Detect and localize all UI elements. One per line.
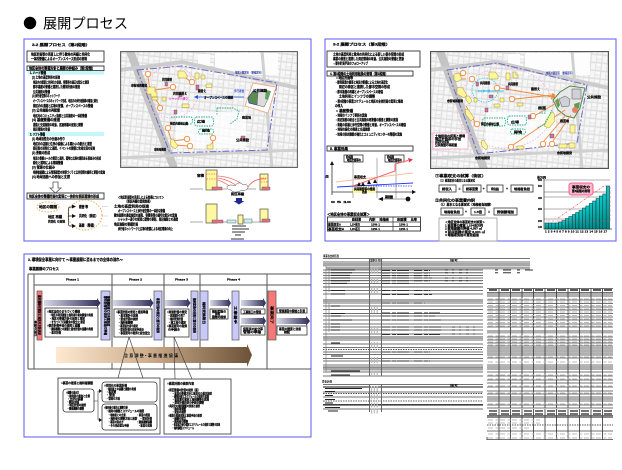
stage 3 text list: ○ 基盤整備 — [336, 108, 353, 113]
formula block: 1 事業費の積算 1,234百万円 — [445, 222, 483, 227]
callout: phase 3 details: ・都市計画決定の手続き調整 — [172, 400, 204, 404]
line chart — [325, 154, 416, 204]
formula block: 4 地権者負担の算定結果 — [445, 232, 479, 237]
bar chart: 400 — [538, 196, 542, 200]
phase text boxes: 事業の精算と効果 — [279, 326, 301, 331]
formula block: ①事業収支の試算（街区） — [435, 173, 486, 178]
phase text boxes: ・関係機関との調整と都市計画の協議の実施 — [49, 326, 93, 331]
stage 2 text list: (3) 管理の仕組み — [32, 164, 55, 170]
line chart: 効果 — [362, 189, 367, 194]
phase text boxes: 工事施工の管理 — [243, 309, 261, 314]
formula block: + — [483, 187, 485, 191]
phase frame: Phase 2 — [129, 278, 142, 282]
arrow: consultation band: 合 意 調 整・事 業 推 進 協 議 — [124, 352, 178, 358]
explanatory notes: シャッター通りの解消と建物の更新、周辺施設との連携 — [118, 216, 178, 222]
map legend — [433, 133, 468, 149]
explanatory notes: 歩行者ネットワークと広場の配置による地区環境の向上 — [118, 226, 173, 231]
line chart: 第3段階 — [387, 154, 394, 159]
line chart: 期間 — [385, 194, 393, 199]
sub box: coordination — [102, 404, 157, 430]
map: stage 2 — [120, 51, 298, 168]
callout: phase 3 details: ・組織の設立 — [172, 416, 186, 420]
panel: stage 2 process — [24, 39, 311, 241]
map: stage 3: 街区内緑地公園 — [481, 121, 499, 126]
phase bars: 事業完了 — [270, 306, 275, 324]
stage 2 text list: 道路と交通施設の改善、区画再編の促進と調整 — [33, 122, 83, 127]
explanatory notes: 土地の高度利用の促進 — [114, 204, 149, 208]
table: annual summary — [487, 409, 613, 440]
bar chart: 1 2 3 4 5 6 7 8 9 10 11 12 13 14 15 16 17 — [545, 230, 607, 234]
formula block: + — [506, 187, 508, 191]
sub box: overview — [63, 389, 94, 412]
stage 3 text list: の導入 — [335, 103, 343, 108]
bar chart: 第3段階の実現 — [572, 188, 590, 193]
map: stage 2: 共同建替 — [162, 76, 172, 82]
callout: phase 3 details: ○事業計画の検討内容 — [167, 380, 194, 386]
stage 2 result box — [27, 193, 104, 199]
stage 3 text list: 土地利用とインフラの調整 — [335, 94, 375, 99]
sub box: coordination: ○権利者の意向と調整方針 — [104, 404, 128, 410]
formula block: 利益 — [491, 186, 499, 191]
map legend: 共同化の促進 — [435, 139, 449, 144]
phase frame: 事業の流れ — [34, 320, 39, 336]
callout: phase 3 details: ・権利者調整 — [172, 406, 186, 411]
stage 2 text list: 都市基盤の整備と連携した開発計画の推進 — [33, 84, 80, 89]
table: cost detail — [323, 254, 535, 376]
phase frame: Phase 4 — [227, 278, 240, 282]
stage 3 text list: ○ 地区計画等 — [336, 75, 353, 80]
map: stage 2: 広場 — [197, 118, 205, 124]
title: 展開プロセス — [43, 16, 128, 32]
phase bars: 基本構想の策定と地区の方針決定 — [37, 295, 42, 335]
sub box: coordination: ・地権者との合意 ・事業の推進 — [108, 412, 150, 417]
callout: phase 2 details: ○事業の推進と権利者調整 — [61, 380, 93, 385]
phase text boxes: の手続き — [168, 326, 180, 332]
process diagram — [37, 200, 108, 230]
table: funding detail: 備考 — [450, 383, 459, 387]
phase frame — [28, 274, 311, 369]
stage 3 text list: 周辺の街区と連携した都市空間の形成 — [335, 84, 390, 89]
table: business comparison: ＜地区全体の事業収支試算＞ — [327, 212, 370, 216]
bar chart: 600 — [538, 178, 542, 182]
table: business comparison: 12% 1 — [371, 227, 380, 231]
table: cost detail: 金額(千円) — [370, 258, 381, 262]
map: stage 3: 広場 — [511, 119, 519, 124]
stage 2 summary box — [27, 51, 104, 62]
phase bars: 工事着手 — [234, 306, 238, 324]
map: stage 2: オープンスペースの連続 — [204, 94, 233, 100]
stage 2 text list: 緑化と照明による環境整備 — [33, 160, 63, 165]
map: stage 2: シャッター通り — [169, 96, 188, 100]
stage 2 text list: 地区内の建替と共同化の促進、容積率の適正な配分と誘導 — [33, 80, 89, 84]
formula block: 1.5倍 — [474, 209, 482, 214]
process diagram: 共同化（街区） — [79, 213, 98, 218]
sub box: overview: ・方針の協議 — [67, 396, 83, 401]
table: cost detail: 備考 — [450, 258, 459, 262]
phase text boxes: ○都市計画手法の検討と協議 — [47, 322, 80, 328]
map: stage 2: 建替え — [198, 88, 206, 93]
stage 2 text list: 2. ソフト整備 — [30, 131, 45, 136]
map legend: 土地利用の促進と環境 — [435, 133, 465, 138]
map: stage 2: 地区計画区域 （整備区域） — [235, 70, 263, 74]
stage 3 summary box — [327, 51, 420, 67]
line chart: 地区計画等の — [388, 157, 402, 162]
phase text boxes: 権利変換の — [212, 308, 226, 314]
stage 2 text list: 周辺環境の改善 — [33, 126, 50, 132]
bar chart — [537, 174, 612, 234]
formula block: （1）事業収支の基本となる算定式 — [439, 178, 475, 182]
formula block: + — [465, 210, 467, 214]
phase text boxes: ・権利者調整 — [118, 320, 133, 324]
formula block: 総事業費 — [466, 186, 478, 191]
explanatory notes: ＜地区計画等の見直しによる効果について＞ — [118, 194, 164, 200]
table: business comparison: 事業収支B — [328, 226, 345, 231]
map: stage 2: 共同建替え — [173, 90, 187, 96]
formula block: （1）基本となる算定式（地権者負担額） — [439, 202, 493, 206]
sub box: planning: ・権利者との協議と調整の実施 — [106, 386, 136, 391]
callout: phase 3 details: ・権利調整スケジュール — [172, 425, 194, 430]
sub box: coordination: ・権利の調整とスケジュールの確認 — [106, 408, 144, 413]
formula block: ＜地区全体の事業収支の試算＞ — [445, 219, 485, 224]
map: stage 3: 建替え — [531, 86, 540, 91]
sub box: overview: ・調査の実施 — [67, 399, 79, 404]
line chart: 第2段階 — [346, 154, 353, 159]
formula block: ②共同化の事業費内訳 — [435, 198, 476, 202]
phase text boxes: ・まちづくり協議会の設立と運営 — [49, 319, 85, 324]
stage 2 text list: 街区内の通路と広場の配置、オープンスペースの整備 — [33, 103, 93, 108]
phase text boxes — [45, 308, 307, 337]
stage 2 text list: 公共施設の整備 — [33, 89, 50, 94]
sub box: overview: ・権利者の意向と合意 — [67, 393, 90, 398]
stage 2 text list: 地権者組織による管理運営の体制づくりと公共空間の維持と更新の実施 — [33, 169, 105, 174]
phase frame: Phase 1 — [66, 278, 79, 282]
map: stage 2: 市街地再開発 — [131, 82, 147, 88]
stage 3 text list: ・地域の防災機能の強化とコミュニティセンターの整備の実施 — [335, 132, 402, 136]
map: stage 3: 共同建替 — [480, 80, 490, 85]
phase text boxes: ・資金計画の検討 — [118, 316, 138, 321]
sub box: coordination: ・事業の進め方 ・関係機関協議 — [108, 419, 152, 424]
map: stage 2: 商業地 — [242, 114, 251, 120]
formula block: = — [488, 210, 490, 214]
map: stage 3: 商業地 — [560, 118, 569, 123]
table: business comparison: 床面積 比率 — [397, 216, 417, 222]
process diagram: 地区の課題 — [39, 204, 58, 209]
explanatory notes — [114, 194, 178, 231]
section diagram: after — [190, 204, 270, 239]
arrow: blue down — [234, 198, 244, 204]
map: stage 3 — [430, 51, 609, 169]
table: business comparison: 12% 1 — [399, 222, 408, 226]
map: stage 3: 地区計画区域 （整備区域） — [546, 70, 574, 75]
sub box: planning: ・資金 — [106, 392, 115, 397]
explanatory notes: 敷地面積の最低限度の緩和、容積率等の適切な配分の実施 — [114, 212, 177, 217]
table: business comparison: 1,234百万 — [350, 226, 360, 231]
phase text boxes: 検証 — [284, 329, 290, 334]
stage 2 heading: 3-2 展開プロセス（第2段階） — [32, 42, 90, 47]
sub box: overview: ○協議の進め方 — [66, 390, 79, 394]
phase text boxes: ・地区の整備方針の検討と策定 — [49, 316, 85, 320]
formula block: 総収入 — [442, 186, 452, 191]
phase text boxes: 保留床の処分等 — [243, 326, 263, 331]
explanatory notes: （街区再編の実現効果） — [125, 198, 152, 204]
stage 3 text list: ・地域のインフラ更新の実施 — [335, 112, 367, 118]
stage 3 text list: 4. 第3段階の土地利用転換の実現（第3段階） — [330, 71, 388, 76]
phase text boxes: ・基本計画 — [49, 330, 61, 334]
sub box: overview: ・関係機関の調整 — [67, 406, 84, 410]
phase text boxes: 管理運営の開始と引渡 — [279, 308, 305, 313]
stage 2 text list: 地区の景観ルールの策定と運用、建物と広場の調和ある街並みの形成 — [33, 156, 101, 160]
stage 2 text list: 1. ハード整備 — [30, 70, 46, 75]
map: stage 3: 商業 — [538, 105, 546, 110]
stage 3 summary box: 事業の推進と連携した周辺環境の改善、公共施設の整備と更新 — [333, 56, 404, 61]
phase bars: 事業計画の策定と認可の取得 — [156, 298, 161, 333]
callout: phase 3 details: ・権利者の調整 — [172, 418, 188, 424]
stage 3 text list: ・周辺施設の統合と公共施設の再整備の推進と調整の実施 — [335, 117, 398, 122]
callout: phase 3 details: ・事業費の算定と権利調整の実施 — [172, 396, 209, 402]
phase text boxes: 管理の準備 — [243, 329, 261, 334]
phase text boxes: ・事業認可の取得と組合設立 — [118, 330, 150, 335]
stage 2 text list: オープンスペースのネットワーク形成、地区内の歩行者動線の確保と緑化 — [33, 98, 98, 103]
map: stage 3: シャッター通 — [475, 88, 490, 93]
stage 3 summary box: 土地の高度利用と敷地の共同化による新しい都市空間の形成 — [333, 52, 404, 56]
phase text boxes: ・地区の現況調査と権利者の意向調査の実施 — [49, 312, 93, 317]
stage 2 text list: (4) 基盤整備の推進 — [32, 117, 60, 122]
phase arrows — [44, 298, 310, 326]
table: business comparison: 事業収支A — [328, 222, 342, 226]
phase text boxes: ・事業協力者の選定 — [118, 323, 138, 328]
stage 2 text list: 商店街の活性化と連携、イベントの開催と地域交流の促進 — [33, 146, 95, 150]
sub box: coordination: ・その他必要な手続 ・事業の実施 — [108, 422, 152, 428]
process diagram: 共同化 の実現 — [48, 218, 65, 224]
table: annual cash flow — [487, 288, 613, 408]
table: business comparison: 12% 1 — [399, 227, 408, 231]
arrow: consultation band — [56, 344, 252, 367]
panel: schedule process — [24, 254, 311, 437]
stage 3 text list: ・第3段階の事業スケジュールと地区の全体計画の実現と推進 — [335, 98, 403, 104]
schedule sub heading: 事業展開のプロセス — [29, 266, 59, 271]
phase text boxes: ○事業計画の策定と推進準備 — [116, 309, 148, 314]
phase text boxes: ・都市計画の決定手続き — [118, 326, 144, 332]
stage 3 text list: ・街路の拡幅と歩行空間の整備と改善、オープンスペースの確保 — [335, 122, 406, 127]
phase bars: 権利変換期日 — [202, 302, 207, 324]
table: business comparison — [327, 212, 420, 231]
phase text boxes: ・基本設計の実施 — [118, 312, 138, 318]
sub box: planning: ○共同化の事業計画 — [104, 382, 127, 388]
phase text boxes: 実施 — [215, 311, 220, 316]
line chart heading — [327, 146, 413, 151]
bar chart: 100 — [538, 225, 542, 229]
stage 2 result box: 地区全体の整備計画の実現と一体的な街区環境の形成 — [29, 194, 99, 198]
line chart: 事業収支 — [354, 174, 366, 179]
formula block: 地権者負担 — [514, 186, 530, 191]
table: business comparison: 内訳 地権者 — [369, 216, 389, 222]
stage 2 text list: (2) 景観の形成 — [32, 150, 50, 155]
stage 2 text list: (1) 土地の高度利用の促進 — [32, 74, 60, 80]
stage 2 text list: (3) 公共施設の再配置 — [32, 108, 60, 112]
callout lines — [118, 337, 192, 379]
phase bars: 権利変換の計画と認可の取得 — [192, 298, 198, 333]
map: stage 3: 共同建替 — [508, 81, 518, 86]
stage 3 summary box: →都市計画手法のフォローアップ — [333, 60, 368, 66]
stage 2 text list: 地区内のコミュニティ施設と公共施設の一体的整備 — [33, 113, 87, 118]
table: cost detail: 事業収支総括表 — [323, 254, 339, 258]
map: stage 3: 市街地再開発 — [447, 98, 463, 103]
sub box: planning: ・事業費 — [106, 389, 116, 394]
phase bars: 関係権利者との合意形成 — [106, 296, 112, 326]
stage 2 text list: 地区内の店舗と住民の協働による賑わいの創出と運営 — [33, 141, 92, 146]
formula block — [435, 173, 533, 241]
callout: phase 3 details: ・事業協力者の選定とスケジュールの検討と調整の実施 — [172, 422, 220, 426]
stage 2 text list: 地区全体の整備方針と展開の枠組み（第2段階） — [29, 66, 95, 71]
formula block: 評価額増加 — [497, 209, 514, 214]
table: funding detail — [322, 380, 483, 412]
callout: phase 3 details — [164, 379, 231, 434]
line chart: 地区計画等の — [347, 157, 361, 162]
panel: stage 3 process — [325, 39, 616, 241]
line chart: 地価 — [325, 175, 330, 178]
stage 2 text list — [27, 66, 105, 179]
map: stage 3: 公共施設 — [587, 94, 601, 99]
sub box: overview: ・地区計画の検討 — [67, 402, 86, 407]
table: funding detail: 資金計画 — [322, 380, 332, 384]
map legend: 公共施設の再配置 — [435, 142, 457, 147]
sub box: coordination: ・権利者の調整方法と検討 ・都市計画 — [108, 416, 152, 420]
phase text boxes: ・施工者の選定 — [168, 320, 186, 324]
section diagram: before: 街区再編 — [231, 191, 244, 196]
callout: phase 3 details: ・資金の検討 — [172, 409, 186, 414]
bar chart: 百万円 — [537, 174, 546, 180]
bar chart: 事業収支の — [572, 184, 590, 189]
explanatory notes: オープンスペースと歩行者空間の一体的な整備 — [118, 208, 165, 213]
formula block: 地権者負担 — [444, 209, 460, 214]
formula block: = — [458, 187, 461, 191]
map: stage 3: 緑地 — [514, 129, 522, 134]
map legend: 地区計画等の手法 — [435, 136, 461, 141]
stage 3 text list: ・地域の緑化の推進と交通施策 — [335, 127, 370, 132]
line chart: 0 5 10 — [331, 200, 352, 204]
map: stage 2: 緑地 — [202, 128, 210, 132]
map: stage 2: 公共施設 — [253, 88, 267, 92]
formula block: 2 敷地面積の評価 4,567 ㎡ — [445, 226, 482, 231]
phase text boxes: ○事業認可の取得 — [167, 323, 187, 328]
callout: phase 2 details — [58, 378, 160, 434]
stage 2 text list: (2) 歩行者空間のネットワーク — [32, 93, 60, 98]
phase bars — [37, 291, 276, 340]
formula block: 3 延床面積の算定 8,901 ㎡ — [445, 229, 485, 234]
phase bars: 都市計画等の決定と事業の準備 — [103, 296, 108, 335]
map: stage 3: 市街地開発 — [475, 155, 490, 160]
sub box: planning: ・管理の方法 — [106, 396, 120, 400]
stage 2 summary box: 地区計画等の見直しに伴う敷地の再編と共同化 — [31, 52, 90, 56]
map: stage 3: 市街地開発 — [557, 150, 572, 155]
phase text boxes: ○地区全体のまちづくり構想 — [47, 308, 80, 314]
callout: phase 3 details: ・建物計画とスケジュールの検討の実施 — [172, 394, 209, 398]
stage 3 text list: ・都市基盤の再編とオープンスペースの確保 — [335, 89, 383, 94]
phase text boxes: 建物の除却 — [212, 314, 226, 319]
bar chart: 300 — [538, 207, 542, 211]
callout: phase 3 details: ○街区整備の計画の検討（案） — [168, 387, 200, 392]
table: business comparison: 1,234百万 — [350, 222, 360, 226]
phase frame: Phase 3 — [175, 278, 188, 282]
stage 3 text list — [327, 71, 413, 136]
callout: phase 3 details: ○共同化の権利調整の実施と検討 — [168, 403, 200, 408]
explanatory notes: 地区施設の整備計画 — [114, 221, 138, 226]
stage 2 summary box: 一体的整備によるオープンスペース形成の実現 — [31, 56, 87, 61]
map: stage 2: 公共施設 — [236, 137, 249, 142]
bar chart: 200 — [538, 219, 542, 223]
callout: phase 3 details: ・事業の整備方針と事業化の基本検討 — [172, 390, 212, 396]
stage 2 text list: (4) 地域活動への参加と支援 — [32, 174, 70, 179]
map: stage 2: 歩行者軸 — [234, 88, 244, 93]
phase text boxes: ○実施計画の策定 — [167, 309, 187, 314]
process diagram: 地区 再編 — [48, 214, 62, 219]
phase text boxes: ・権利変換計画 — [168, 316, 183, 321]
callout: phase 3 details: ○事業の推進体制と事業手法の検討 — [168, 412, 202, 418]
schedule heading: 3. 環境保全事業に向けて ～事業展開に至るまでの全体の流れ～ — [28, 256, 123, 262]
map: stage 2: 街区内緑地公園 — [170, 120, 188, 126]
stage 2 text list: (1) 地域活性化の仕組み作り — [32, 136, 65, 141]
table: business comparison: 12% 1 — [371, 222, 380, 226]
process diagram: 建替 等 — [79, 204, 88, 209]
phase text boxes: ・実施設計の完了 — [168, 312, 185, 318]
table: business comparison: 総事業費 — [352, 216, 361, 222]
section diagram: before — [190, 170, 270, 196]
arrow: down hollow — [50, 182, 61, 193]
stage 3 text list: ・開発事業の誘導と地区の整備による土地の高度化 — [335, 80, 388, 84]
process diagram: 基盤 （整備） — [79, 222, 96, 228]
bar chart: 500 — [538, 184, 542, 188]
stage 3 heading: 3-2 展開プロセス（第3段階） — [333, 42, 390, 46]
map: stage 2: 市街地開発 — [154, 146, 166, 152]
section diagram: before: 容積 — [197, 172, 204, 178]
sub box: planning — [102, 382, 157, 402]
line chart heading: 5. 事業効果 — [330, 146, 348, 151]
line chart: 共同建替等の推進 — [354, 186, 375, 191]
